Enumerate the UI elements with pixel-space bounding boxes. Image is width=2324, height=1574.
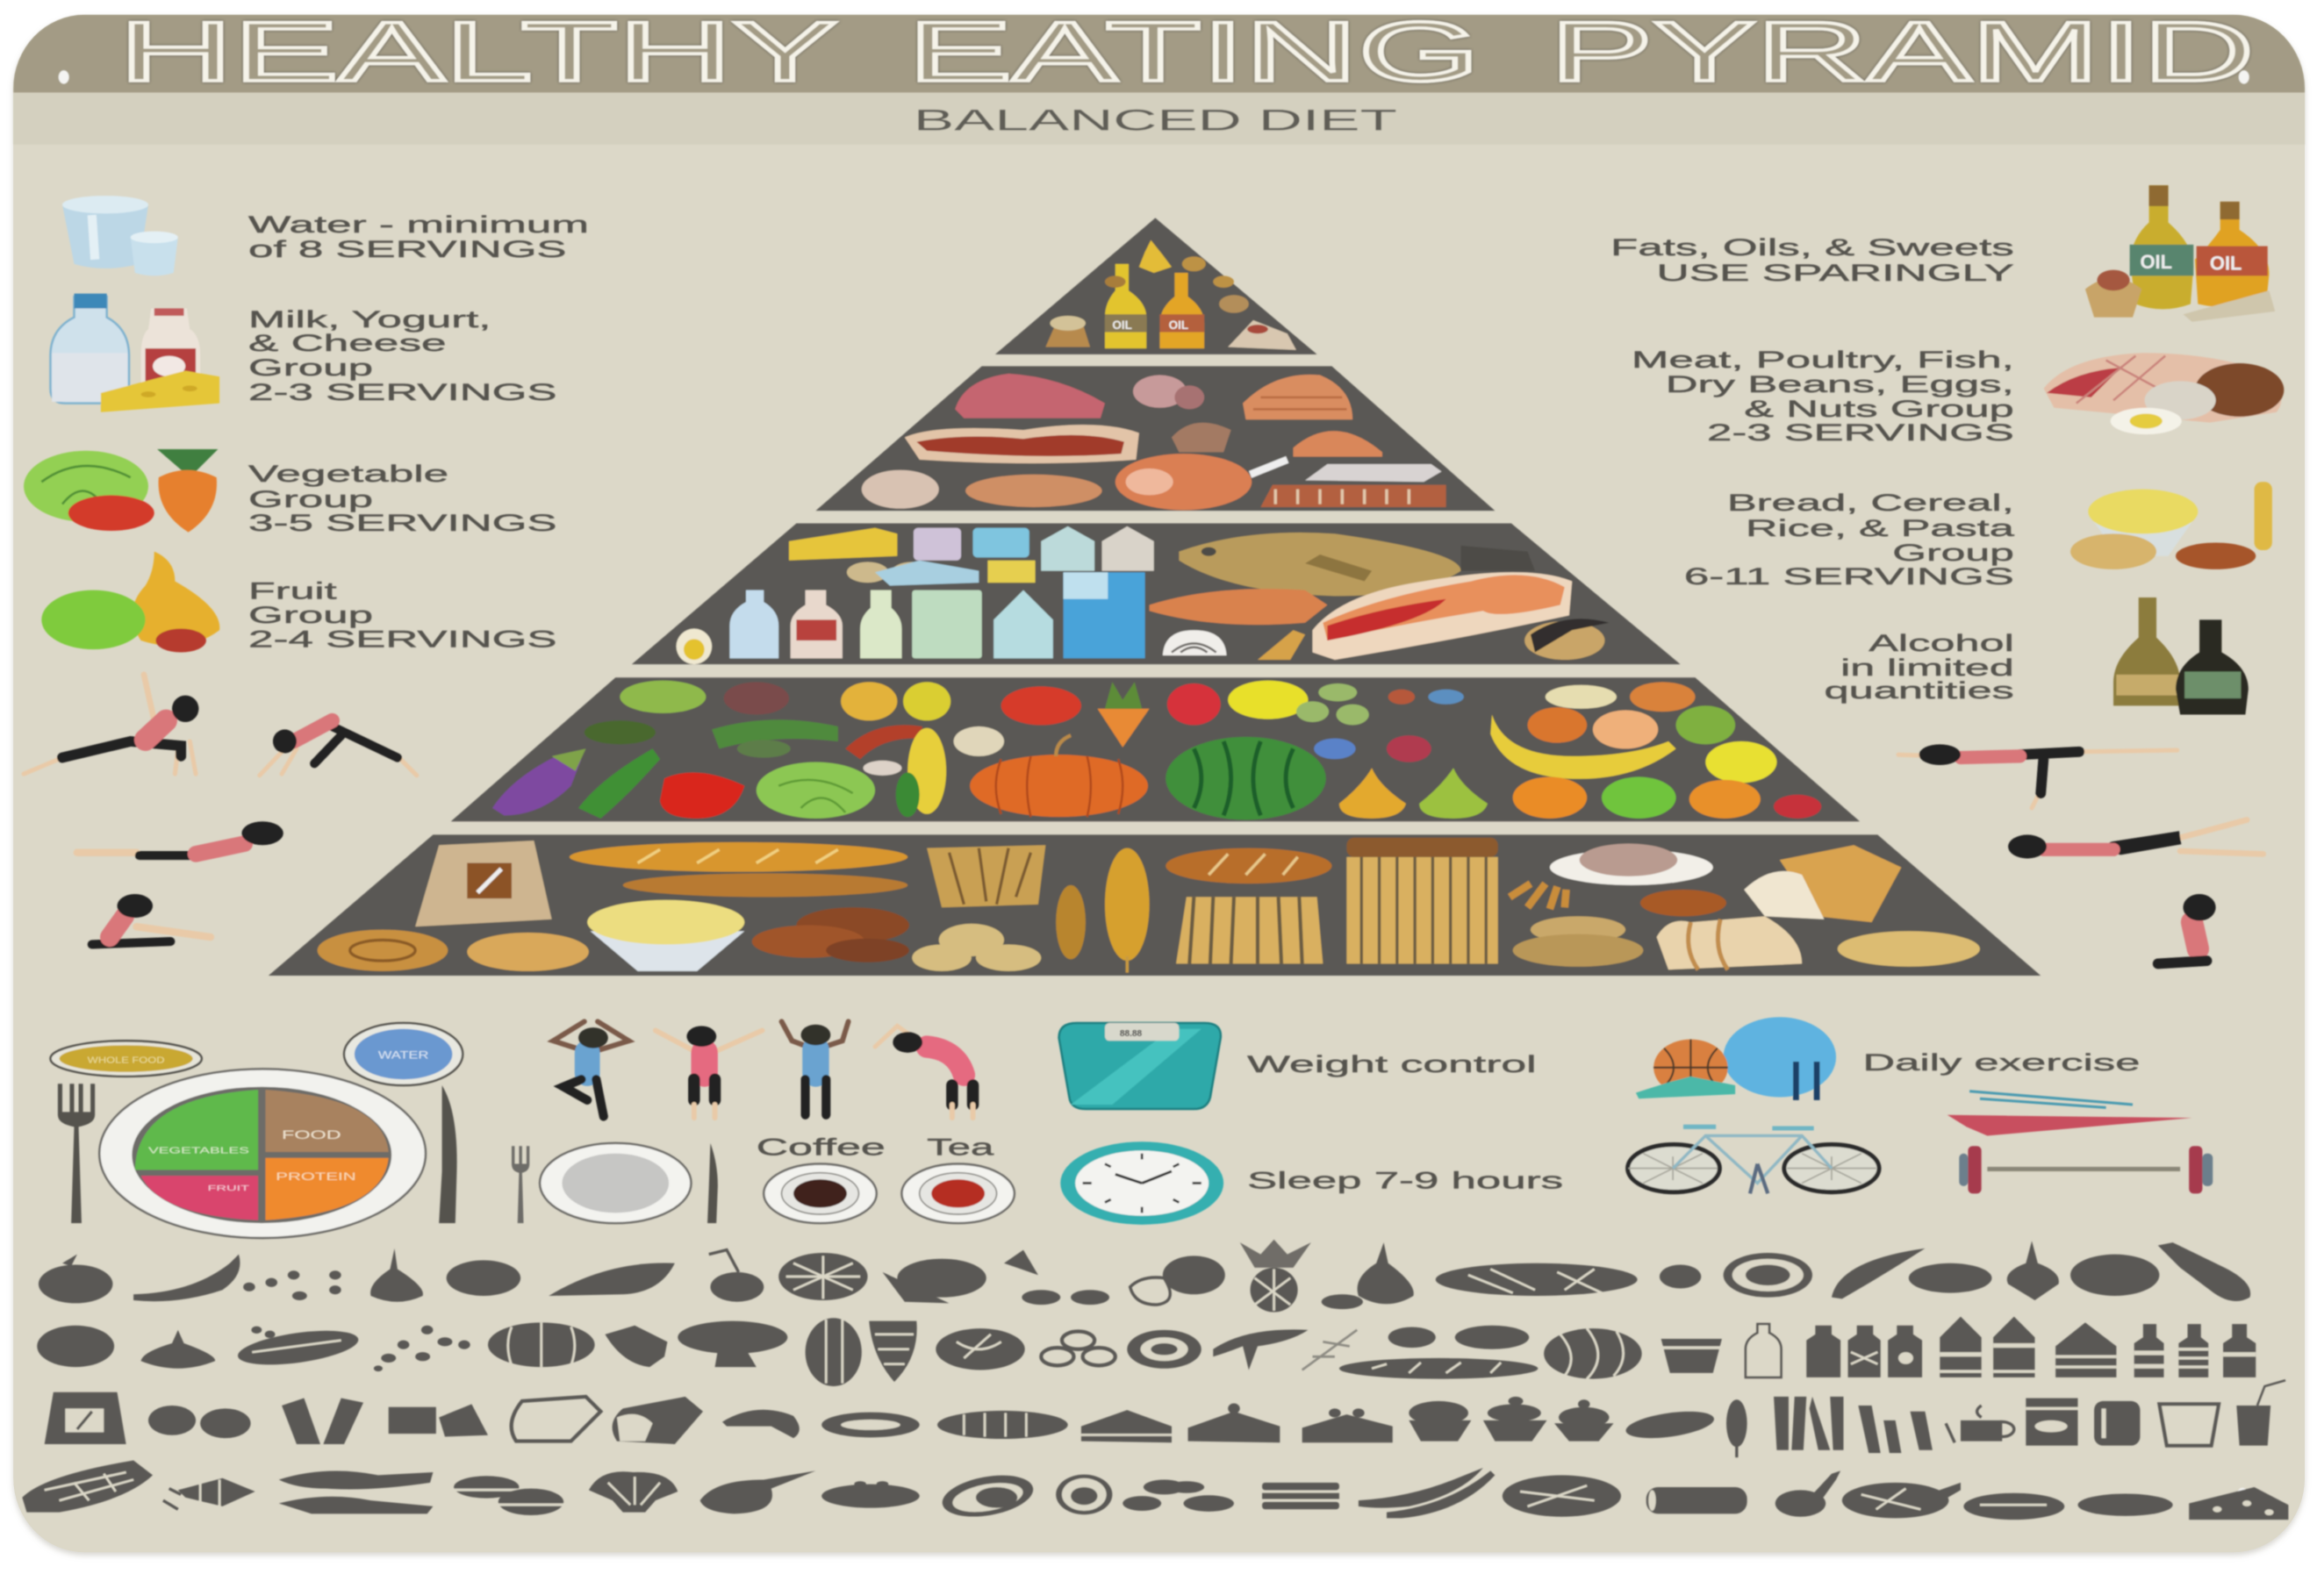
title: EATING (907, 5, 1480, 99)
subtitle: BALANCED DIET (914, 104, 1397, 138)
icon: fruit (41, 552, 219, 653)
icon: barbell (1959, 1146, 2213, 1193)
icon: MyPlate food plate: PROTEIN (276, 1170, 356, 1183)
icon: weighing scale: 88.88 (1120, 1029, 1143, 1039)
icon: bicycle (1628, 1127, 1879, 1193)
pyramid tier 3: dairy and fish (632, 524, 1681, 664)
text: sleep hours: Sleep 7-9 hours (1247, 1167, 1563, 1193)
icon: fats and oils bottles: OIL (2140, 251, 2172, 273)
text block: left serving labels (248, 211, 589, 652)
text block: left serving labels: Vegetable (248, 461, 448, 487)
text block: right serving labels: Dry Beans, Eggs, (1666, 371, 2014, 397)
chart: food pyramid (269, 218, 2041, 976)
pyramid tier 1: fats and sweets: OIL (1112, 318, 1132, 332)
text block: left serving labels: Milk, Yogurt, (248, 306, 491, 333)
icon: whole grain oval (50, 1041, 202, 1077)
icon: bread, cereal and pasta (2070, 482, 2272, 569)
text block: left serving labels: Group (248, 354, 373, 381)
icon: yoga figures left (24, 675, 417, 944)
icon: small plate and cutlery (512, 1143, 718, 1223)
title (118, 5, 2255, 99)
icon row: vegetable and dairy silhouettes (37, 1317, 2256, 1386)
pyramid tier 1: fats and sweets (995, 218, 1317, 354)
text block: left serving labels: Water - minimum (248, 211, 589, 238)
icon: meat, fish and eggs (2044, 353, 2284, 434)
icon: MyPlate food plate (99, 1069, 426, 1238)
icon: weighing scale (1059, 1023, 1221, 1109)
pyramid tier 5: grains (269, 834, 2041, 976)
icon: skipping rope bands (1947, 1091, 2192, 1135)
text block: right serving labels: 2-3 SERVINGS (1707, 419, 2014, 446)
pyramid tier 4: vegetables and fruit (451, 677, 1860, 821)
icon: sports equipment (1636, 1017, 1836, 1100)
icon: water circle: WATER (378, 1049, 428, 1062)
text block: left serving labels: & Cheese (248, 330, 447, 356)
icon: yoga figures right (1898, 744, 2263, 963)
text: coffee and tea labels (757, 1134, 994, 1160)
pyramid tier 1: fats and sweets: OIL (1169, 318, 1188, 332)
text: daily exercise: Daily exercise (1862, 1049, 2140, 1076)
icon: fats and oils bottles (2085, 185, 2275, 322)
icon: MyPlate food plate: FOOD (282, 1128, 341, 1141)
text block: left serving labels: 2-3 SERVINGS (248, 379, 557, 405)
text block: right serving labels: in limited (1840, 655, 2014, 681)
icon: fork left (58, 1084, 95, 1223)
text block: right serving labels: USE SPARINGLY (1657, 260, 2014, 286)
pyramid tier 2: meat (815, 366, 1495, 511)
text block: left serving labels: 2-4 SERVINGS (248, 626, 557, 652)
title: PYRAMID (1550, 5, 2255, 99)
icon: milk, yogurt and cheese (50, 294, 219, 412)
icon row: fish and meat silhouettes (22, 1461, 2288, 1523)
text block: right serving labels: & Nuts Group (1744, 396, 2014, 422)
text block: right serving labels: Rice, & Pasta (1746, 515, 2014, 541)
text block: right serving labels: Meat, Poultry, Fish, (1632, 347, 2014, 373)
text block: right serving labels: Group (1892, 540, 2014, 566)
text block: left serving labels: of 8 SERVINGS (248, 236, 567, 262)
icon: vegetables (24, 449, 218, 533)
text: coffee and tea labels: Tea (927, 1134, 994, 1160)
text block: left serving labels: 3-5 SERVINGS (248, 510, 557, 536)
text block: right serving labels: Alcohol (1869, 630, 2014, 656)
text block: left serving labels: Group (248, 486, 373, 512)
icon: fats and oils bottles: OIL (2210, 253, 2242, 275)
icon: MyPlate food plate: FRUIT (208, 1184, 249, 1192)
icon: exercising people (553, 1021, 973, 1118)
icon: tea cup (901, 1164, 1015, 1223)
icon: wall clock (1060, 1141, 1223, 1225)
icon: wine and liquor bottles (2113, 597, 2249, 715)
text block: right serving labels: Fats, Oils, & Sweets (1610, 234, 2014, 261)
text block: right serving labels (1610, 234, 2014, 704)
text: coffee and tea labels: Coffee (757, 1134, 886, 1160)
icon: whole grain oval: WHOLE FOOD (88, 1056, 165, 1066)
icon: coffee cup (764, 1164, 877, 1223)
icon: water glasses (62, 196, 178, 275)
text block: right serving labels: Bread, Cereal, (1727, 490, 2014, 516)
icon: knife left (439, 1085, 457, 1223)
text block: left serving labels: Group (248, 602, 373, 628)
text: weight control: Weight control (1247, 1051, 1537, 1077)
icon row: bread, sweets and drink silhouettes (45, 1380, 2285, 1457)
text block: left serving labels: Fruit (248, 578, 338, 605)
icon row: fruit silhouettes (39, 1240, 2250, 1313)
icon: MyPlate food plate: VEGETABLES (148, 1147, 249, 1156)
icon: water circle (344, 1023, 463, 1085)
text block: right serving labels: quantities (1825, 677, 2014, 704)
title: HEALTHY (118, 5, 838, 99)
text block: right serving labels: 6-11 SERVINGS (1684, 563, 2014, 590)
header band (13, 15, 2305, 145)
